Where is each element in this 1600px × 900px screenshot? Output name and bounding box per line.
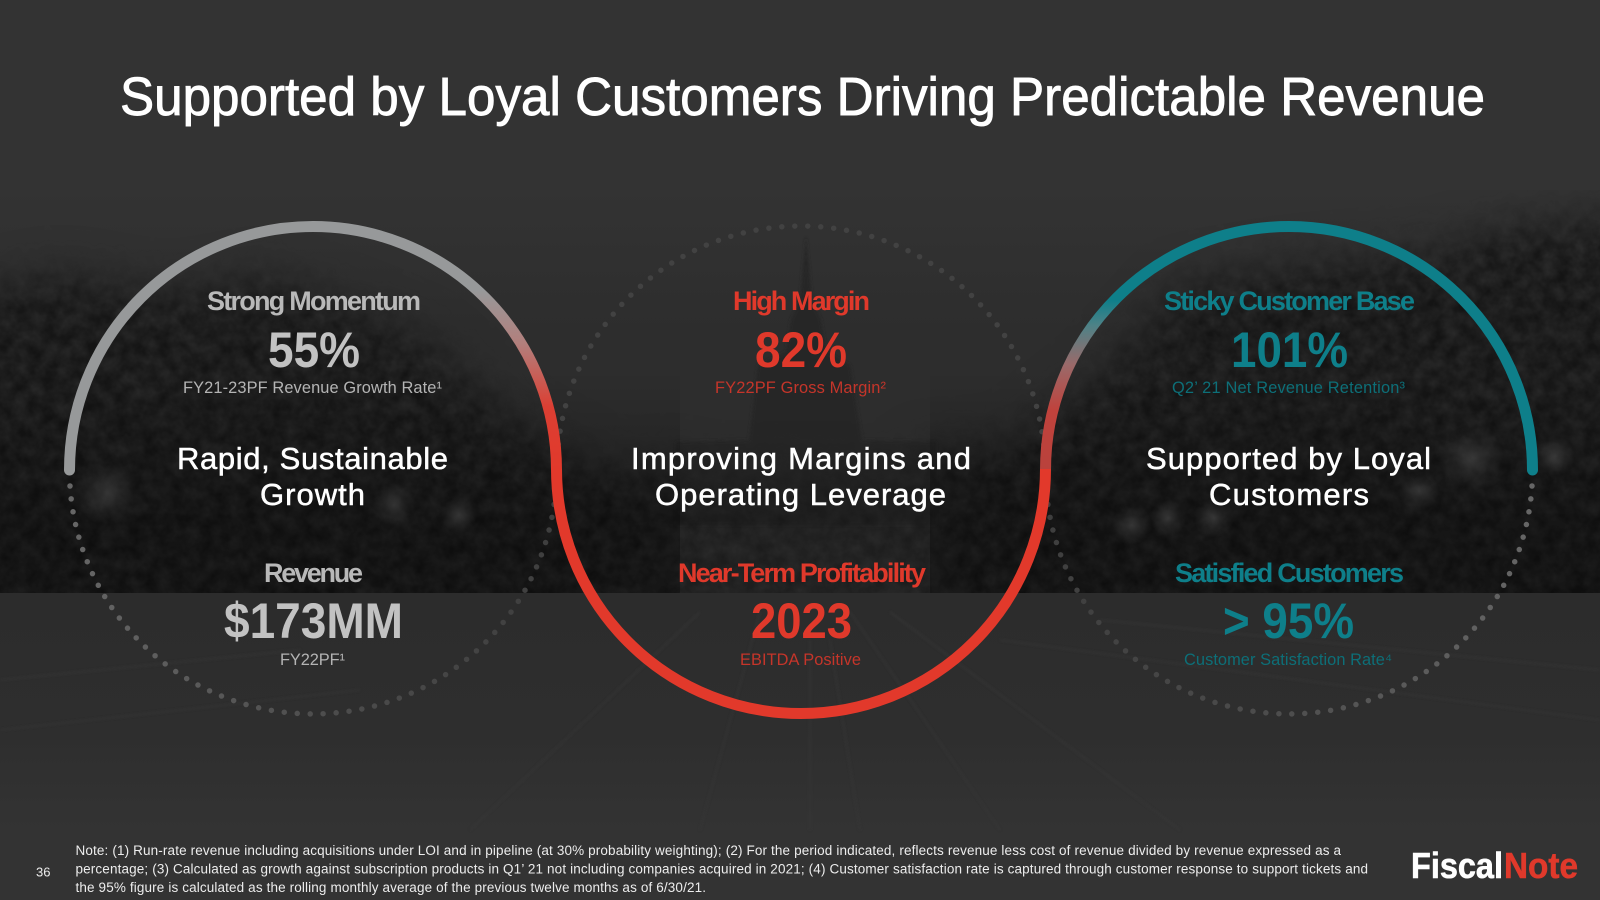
- panel: rapid sustainable growth: [177, 286, 448, 669]
- title: Supported by Loyal Customers Driving Predictable Revenue: [120, 67, 1485, 127]
- metric: sticky customer base: 101%: [1231, 322, 1348, 378]
- background photo: road with capitol and trees: [0, 204, 1600, 664]
- footnote: [76, 843, 1368, 895]
- heading: rapid sustainable growth: Growth: [260, 477, 365, 512]
- metric: satisfied customers: Satisfied Customers: [1175, 558, 1404, 588]
- metric: high margin: FY22PF Gross Margin²: [715, 379, 887, 397]
- logo: FiscalNote: Note: [1504, 845, 1578, 886]
- metric: strong momentum: Strong Momentum: [207, 286, 421, 316]
- tree line: [0, 190, 1600, 593]
- metric: sticky customer base: Sticky Customer Base: [1164, 286, 1415, 316]
- metric: strong momentum: 55%: [268, 322, 360, 378]
- metric: near-term profitability: [678, 558, 926, 669]
- footnote: Note: (1) Run-rate revenue including acquisitions under LOI and in pipeline (at 30% probability weighting); (2) For the period indicated, reflects revenue less cost of revenue divided by revenue expressed as a: [76, 843, 1341, 858]
- metric: strong momentum: FY21-23PF Revenue Growth Rate¹: [183, 379, 443, 397]
- heading: improving margins and operating leverage: [631, 441, 971, 512]
- heading: improving margins and operating leverage: Operating Leverage: [655, 477, 946, 512]
- metric: sticky customer base: [1164, 286, 1415, 397]
- footnote: percentage; (3) Calculated as growth against subscription products in Q1’ 21 not including companies acquired in 2021; (4) Customer satisfaction rate is captured through customer response to support tickets and: [76, 862, 1368, 876]
- metric: revenue: Revenue: [264, 558, 363, 588]
- metric: sticky customer base: Q2’ 21 Net Revenue Retention³: [1172, 379, 1406, 397]
- metric: high margin: 82%: [755, 322, 847, 378]
- metric: revenue: $173MM: [224, 593, 403, 649]
- metric: high margin: High Margin: [733, 286, 870, 316]
- metric: satisfied customers: > 95%: [1223, 593, 1354, 649]
- dotted circle segments: [70, 226, 1532, 714]
- capitol silhouette: [676, 236, 936, 525]
- continuous arc line: gray, red, teal: [70, 226, 1532, 714]
- metric: satisfied customers: [1175, 558, 1404, 669]
- heading: rapid sustainable growth: Rapid, Sustainable: [177, 441, 448, 476]
- panel: supported by loyal customers: [1146, 286, 1431, 669]
- metric: near-term profitability: Near-Term Profitability: [678, 558, 926, 588]
- logo: FiscalNote: [1411, 845, 1578, 886]
- heading: supported by loyal customers: Customers: [1209, 477, 1369, 512]
- heading: supported by loyal customers: [1146, 441, 1431, 512]
- metric: near-term profitability: EBITDA Positive: [740, 651, 861, 669]
- panel: improving margins: [631, 286, 971, 669]
- page number: 36: [36, 864, 50, 880]
- metric: strong momentum: [183, 286, 443, 397]
- heading: rapid sustainable growth: [177, 441, 448, 512]
- metric: revenue: [224, 558, 403, 669]
- metric: revenue: FY22PF¹: [280, 651, 346, 669]
- metric: near-term profitability: 2023: [751, 593, 852, 649]
- footnote: the 95% figure is calculated as the rolling monthly average of the previous twelve months as of 6/30/21.: [76, 880, 706, 895]
- heading: improving margins and operating leverage: Improving Margins and: [631, 441, 971, 476]
- logo: FiscalNote: Fiscal: [1411, 845, 1503, 886]
- metric: high margin: [715, 286, 887, 397]
- metric: satisfied customers: Customer Satisfaction Rate⁴: [1184, 651, 1392, 669]
- heading: supported by loyal customers: Supported by Loyal: [1146, 441, 1431, 476]
